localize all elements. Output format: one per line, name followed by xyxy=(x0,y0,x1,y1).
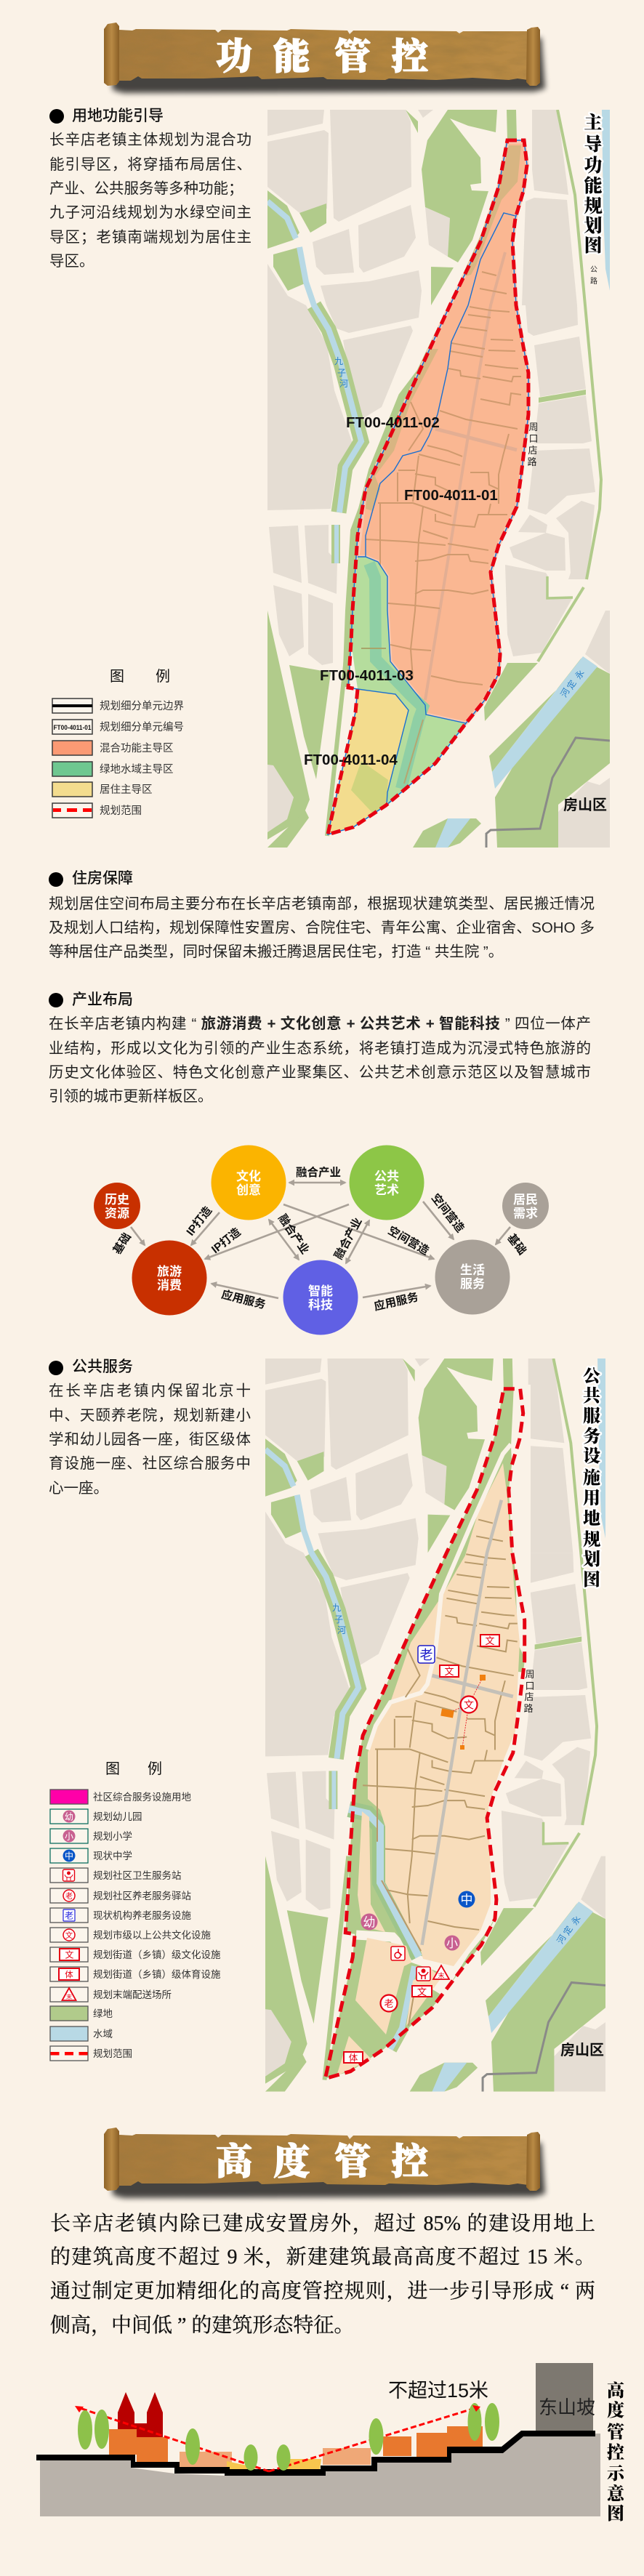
unit labels: FT00-4011-04 xyxy=(304,752,398,768)
river label: 子 xyxy=(334,1614,343,1625)
arrow labels: 空间营造 xyxy=(429,1191,467,1235)
icon: street culture xyxy=(440,1665,459,1677)
main road xyxy=(422,1500,502,1945)
node: 智能科技: 科技 xyxy=(308,1298,333,1312)
tall building: 东山坡 xyxy=(536,2363,595,2431)
vertical title: 功 xyxy=(584,156,603,176)
orange facility plots xyxy=(440,1675,486,1750)
node: 文化创意: 文化 xyxy=(236,1169,261,1183)
arrowheads xyxy=(75,2405,480,2412)
body text: 育设施一座、社区综合服务中 xyxy=(49,1455,251,1472)
text block: height control: 通过制定更加精细化的高度管控规则，进一步引导形成 “ 两 xyxy=(50,2280,595,2303)
vertical title: 划 xyxy=(583,1550,600,1569)
vertical title: 规 xyxy=(584,196,603,217)
body text: 引领的城市更新样板区。 xyxy=(49,1088,212,1105)
legend: public services: 老 xyxy=(65,1910,73,1920)
river label: 永 xyxy=(573,668,587,681)
arrow labels: 融合产业 xyxy=(331,1215,365,1262)
banner title: 控 xyxy=(392,2141,428,2182)
legend: public services: 规划社区卫生服务站 xyxy=(93,1870,182,1881)
body text: 学和幼儿园各一座，街区级体 xyxy=(49,1431,251,1448)
icon: city culture xyxy=(461,1696,477,1712)
legend: public services: 末 xyxy=(66,1993,72,2000)
section: 产业布局 xyxy=(49,991,591,1105)
icon: kindergarten xyxy=(361,1913,378,1931)
arrow labels: IP打造 xyxy=(183,1203,214,1239)
legend: public services: 规划市级以上公共文化设施 xyxy=(93,1929,211,1941)
icon: middle school xyxy=(458,1891,475,1907)
banner title: 度 xyxy=(273,2141,310,2182)
internal streets xyxy=(363,1520,518,1930)
body text xyxy=(49,895,595,960)
body text: 历史文化体验区、特色文化创意产业聚集区、公共艺术创意示范区以及智慧城市 xyxy=(49,1064,591,1081)
heading: 产业布局 xyxy=(72,991,133,1008)
node: 居民需求: 居民 xyxy=(513,1193,538,1207)
arrow labels: 融合产业 xyxy=(296,1165,341,1179)
node: 旅游消费: 旅游 xyxy=(157,1264,182,1279)
unit labels xyxy=(304,414,498,768)
river label: 定 xyxy=(561,1924,575,1937)
legend: public services: 规划幼儿园 xyxy=(93,1811,142,1822)
legend: public services: 绿地 xyxy=(93,2008,113,2019)
banner title: 管 xyxy=(334,36,371,77)
legend: public services: 小 xyxy=(65,1832,73,1842)
legend: public services: 体 xyxy=(65,1970,73,1980)
legend: public services: 老 xyxy=(65,1891,73,1901)
banner title: 高 xyxy=(216,2141,252,2182)
river label: 子 xyxy=(337,368,346,378)
icon: sports: 体 xyxy=(349,2053,358,2063)
plots xyxy=(337,1463,520,2076)
icon: street culture: 文 xyxy=(444,1666,454,1677)
planning boundary xyxy=(325,1389,525,2079)
zone: mixed function xyxy=(358,142,528,723)
icon: street culture: 文 xyxy=(485,1635,495,1646)
body text: 中、天颐养老院，规划新建小 xyxy=(49,1407,251,1424)
road label: 口 xyxy=(528,433,539,444)
body text: 在长辛店老镇内构建 “ 旅游消费 + 文化创意 + 公共艺术 + 智能科技 ” 四位一体产 xyxy=(49,1015,591,1032)
river label: 河 xyxy=(555,1933,568,1946)
body text: 心一座。 xyxy=(49,1480,108,1497)
node: 历史资源: 历史 xyxy=(105,1193,129,1207)
icon: street culture xyxy=(412,1986,432,1997)
river xyxy=(349,1809,419,2049)
legend: public services: 现状中学 xyxy=(93,1851,132,1861)
legend: land use: 混合功能主导区 xyxy=(100,742,173,754)
tall building: 东山坡: 东山坡 xyxy=(539,2396,595,2418)
banner title: 管 xyxy=(334,2141,371,2182)
node: 生活服务: 服务 xyxy=(460,1277,485,1291)
arrow labels: 应用服务 xyxy=(373,1289,420,1313)
node: 历史资源: 资源 xyxy=(105,1207,129,1220)
legend: land use: 居住主导区 xyxy=(100,784,153,796)
icon: existing elderly facility: 老 xyxy=(420,1648,433,1662)
bullet xyxy=(49,993,63,1007)
terrain line xyxy=(36,2431,595,2476)
icon: primary school xyxy=(445,1935,459,1951)
lane along plots xyxy=(368,1444,511,1750)
arrow labels: 基础 xyxy=(110,1231,134,1257)
icon: city culture: 文 xyxy=(464,1699,474,1711)
node: 智能科技: 智能 xyxy=(308,1284,333,1298)
icon: delivery: 末 xyxy=(438,1971,445,1979)
subdivision unit lines xyxy=(358,213,515,805)
body text: 等种居住产品类型，同时保留未搬迁腾退居民住宅，打造 “ 共生院 ”。 xyxy=(49,943,503,960)
road label: 周 xyxy=(525,1669,535,1680)
text block: height control: 的建筑高度不超过 9 米，新建建筑最高高度不超过 15 米。 xyxy=(50,2246,595,2269)
vertical title: 高度管控示意图: 示 xyxy=(607,2464,627,2484)
road label: 路 xyxy=(527,456,537,467)
district label: 房山区 xyxy=(560,2042,604,2058)
river label: 河 xyxy=(339,379,348,389)
legend: land use xyxy=(52,668,184,818)
legend: public services: 规划街道（乡镇）级文化设施 xyxy=(93,1949,221,1960)
map: 公共服务设施用地规划图 xyxy=(265,1359,605,2092)
body text xyxy=(49,1382,251,1497)
body text: 在长辛店老镇内保留北京十 xyxy=(49,1382,251,1399)
legend: public services: 幼 xyxy=(65,1811,73,1822)
road label: 店 xyxy=(528,445,538,456)
ground xyxy=(40,2434,600,2516)
body text: 产业、公共服务等多种功能； xyxy=(49,180,243,197)
legend: public services: 文 xyxy=(65,1949,74,1960)
legend: public services: 规划街道（乡镇）级体育设施 xyxy=(93,1969,221,1980)
river label: 河 xyxy=(558,686,572,699)
vertical title: 高度管控示意图 xyxy=(607,2380,627,2524)
vertical title: 高度管控示意图: 控 xyxy=(607,2442,624,2463)
legend: public services: 水域 xyxy=(93,2029,113,2040)
legend: public services: 文 xyxy=(65,1931,73,1940)
icon: sports xyxy=(344,2052,363,2063)
icon: existing elderly facility xyxy=(418,1646,435,1663)
text block: height control: 侧高，中间低 ” 的建筑形态特征。 xyxy=(50,2314,354,2337)
heading: 住房保障 xyxy=(72,870,133,887)
node: 公共艺术 xyxy=(349,1146,424,1220)
arrow labels xyxy=(110,1165,529,1313)
unit labels: FT00-4011-01 xyxy=(404,487,498,504)
height limit lines xyxy=(78,2407,478,2471)
legend: land use: FT00-4011-01 xyxy=(54,724,92,731)
legend: public services xyxy=(49,1760,221,2061)
section: 住房保障 xyxy=(49,869,595,960)
icon: elderly station xyxy=(381,1995,397,2012)
zone: green and water xyxy=(351,557,466,805)
node: 文化创意: 创意 xyxy=(236,1183,261,1197)
vertical title: 主 xyxy=(584,113,603,133)
body text xyxy=(49,132,251,270)
section: 用地功能引导 xyxy=(49,108,251,270)
heading: 用地功能引导 xyxy=(72,108,164,124)
vertical title: 图 xyxy=(584,236,603,256)
vertical title: 高度管控示意图: 度 xyxy=(607,2400,624,2420)
vertical title: 高度管控示意图: 图 xyxy=(607,2504,624,2524)
legend: public services: 规划范围 xyxy=(93,2048,132,2059)
icon: street culture xyxy=(480,1635,499,1646)
map: 主导功能规划图 xyxy=(267,110,610,848)
legend: land use: 规划范围 xyxy=(100,805,142,817)
road label: 路 xyxy=(590,276,597,286)
banner title: 控 xyxy=(392,36,428,77)
vertical title: 务 xyxy=(583,1427,600,1446)
legend: public services: 中 xyxy=(65,1851,73,1861)
church xyxy=(118,2392,163,2437)
bullet xyxy=(49,872,63,887)
legend: land use: 绿地水域主导区 xyxy=(100,763,173,776)
road label: 店 xyxy=(524,1691,534,1702)
icon: delivery xyxy=(433,1965,449,1979)
node: 历史资源 xyxy=(94,1183,140,1229)
body text: 能引导区，将穿插布局居住、 xyxy=(49,156,251,173)
banner title: 能 xyxy=(273,36,310,77)
vertical title: 公 xyxy=(583,1367,601,1386)
legend title: 图 xyxy=(110,669,124,685)
unit labels: FT00-4011-02 xyxy=(346,414,440,431)
vertical title: 划 xyxy=(584,216,603,236)
heading: 公共服务 xyxy=(72,1359,133,1375)
vertical title: 设 xyxy=(583,1446,600,1466)
arrows xyxy=(131,1183,510,1298)
legend: land use: 规划细分单元编号 xyxy=(100,721,184,733)
text block: height control xyxy=(50,2213,595,2337)
banner title: 功 xyxy=(216,36,252,77)
road label: 周 xyxy=(528,422,539,432)
section: 公共服务 xyxy=(49,1359,251,1497)
node: 生活服务 xyxy=(435,1240,510,1314)
legend: public services: 规划小学 xyxy=(93,1831,132,1842)
district label: 房山区 xyxy=(563,797,607,813)
node: 旅游消费: 消费 xyxy=(157,1279,182,1292)
vertical title: 高度管控示意图: 高 xyxy=(607,2380,624,2401)
legend: public services: 社区综合服务设施用地 xyxy=(93,1792,191,1803)
vertical title: 施 xyxy=(583,1468,600,1488)
icon: street culture: 文 xyxy=(417,1987,427,1997)
road label: 口 xyxy=(525,1681,535,1691)
body text: 业结构，形成以文化为引领的产业生态系统，将老镇打造成为沉浸式特色旅游的 xyxy=(49,1040,591,1057)
arrow labels: IP打造 xyxy=(209,1225,243,1256)
legend: public services: 现状机构养老服务设施 xyxy=(93,1910,191,1921)
legend title: 例 xyxy=(156,668,170,685)
zone: residential xyxy=(328,689,408,834)
vertical title: 共 xyxy=(583,1386,601,1406)
river label: 永 xyxy=(569,1914,583,1927)
banner: 功能管控 xyxy=(104,23,550,97)
vertical title: 高度管控示意图: 意 xyxy=(607,2484,626,2504)
node: 居民需求 xyxy=(502,1183,549,1229)
legend: land use: 规划细分单元边界 xyxy=(100,700,184,712)
body text: 及规划人口结构，规划保障性安置房、合院住宅、青年公寓、企业宿舍、SOHO 多 xyxy=(49,919,595,936)
river label: 九 xyxy=(334,356,343,366)
icon: middle school: 中 xyxy=(461,1893,472,1907)
vertical title: 图 xyxy=(583,1570,600,1590)
river label xyxy=(555,1914,583,1946)
body text xyxy=(49,1015,591,1105)
node: 公共艺术: 公共 xyxy=(374,1170,399,1183)
river label xyxy=(558,668,587,699)
arrow labels: 应用服务 xyxy=(220,1287,267,1311)
industry relationship diagram xyxy=(94,1146,549,1335)
body text: 导区；老镇南端规划为居住主 xyxy=(49,229,251,246)
body text: 长辛店老镇主体规划为混合功 xyxy=(49,132,251,148)
legend: public services: 规划社区养老服务驿站 xyxy=(93,1891,191,1901)
text block: height control: 长辛店老镇内除已建成安置房外，超过 85% 的建设用地上 xyxy=(50,2213,595,2235)
banner: 高度管控 xyxy=(104,2128,550,2202)
height section diagram xyxy=(36,2363,600,2516)
arrow labels: 空间营造 xyxy=(386,1223,432,1258)
planning boundary xyxy=(328,140,528,834)
arrow labels: 融合产业 xyxy=(275,1212,313,1257)
vertical title: 能 xyxy=(584,176,603,196)
river label: 河 xyxy=(337,1625,346,1635)
node: 智能科技 xyxy=(283,1260,358,1335)
bullet xyxy=(49,109,64,124)
road covers xyxy=(511,1385,531,1672)
vertical title: 规 xyxy=(583,1529,600,1550)
node: 生活服务: 生活 xyxy=(460,1263,485,1277)
icon: elderly station: 老 xyxy=(384,1998,394,2009)
legend title: 例 xyxy=(148,1760,162,1777)
connectors xyxy=(447,1678,483,1747)
trees xyxy=(78,2403,499,2471)
vertical title: 高度管控示意图: 管 xyxy=(607,2422,624,2442)
icon: primary school: 小 xyxy=(446,1937,458,1950)
buildings xyxy=(109,2426,483,2462)
node: 居民需求: 需求 xyxy=(513,1207,538,1220)
river label: 九 xyxy=(332,1603,341,1613)
icon: health station xyxy=(416,1967,430,1981)
node: 旅游消费 xyxy=(132,1240,206,1316)
road label: 公 xyxy=(590,266,597,274)
height label: 不超过15米 xyxy=(388,2380,488,2402)
vertical title: 导 xyxy=(584,134,603,155)
legend title: 图 xyxy=(105,1761,120,1777)
icon: accessibility xyxy=(391,1947,405,1960)
vertical title: 用 xyxy=(583,1489,600,1508)
unit labels: FT00-4011-03 xyxy=(320,667,414,684)
arrow labels: 基础 xyxy=(504,1231,529,1257)
vertical title: 服 xyxy=(583,1406,600,1426)
road label: 路 xyxy=(523,1703,534,1714)
vertical title: 地 xyxy=(583,1509,600,1529)
icon: kindergarten: 幼 xyxy=(363,1916,375,1929)
bullet xyxy=(49,1361,63,1375)
body text: 规划居住空间布局主要分布在长辛店老镇南部，根据现状建筑类型、居民搬迁情况 xyxy=(49,895,595,912)
node: 公共艺术: 艺术 xyxy=(374,1183,399,1197)
river label: 定 xyxy=(565,678,579,691)
body text: 导区。 xyxy=(49,253,94,270)
node: 文化创意 xyxy=(211,1146,286,1220)
body text: 九子河沿线规划为水绿空间主 xyxy=(49,204,251,221)
legend: public services: 规划末端配送场所 xyxy=(93,1989,172,2000)
